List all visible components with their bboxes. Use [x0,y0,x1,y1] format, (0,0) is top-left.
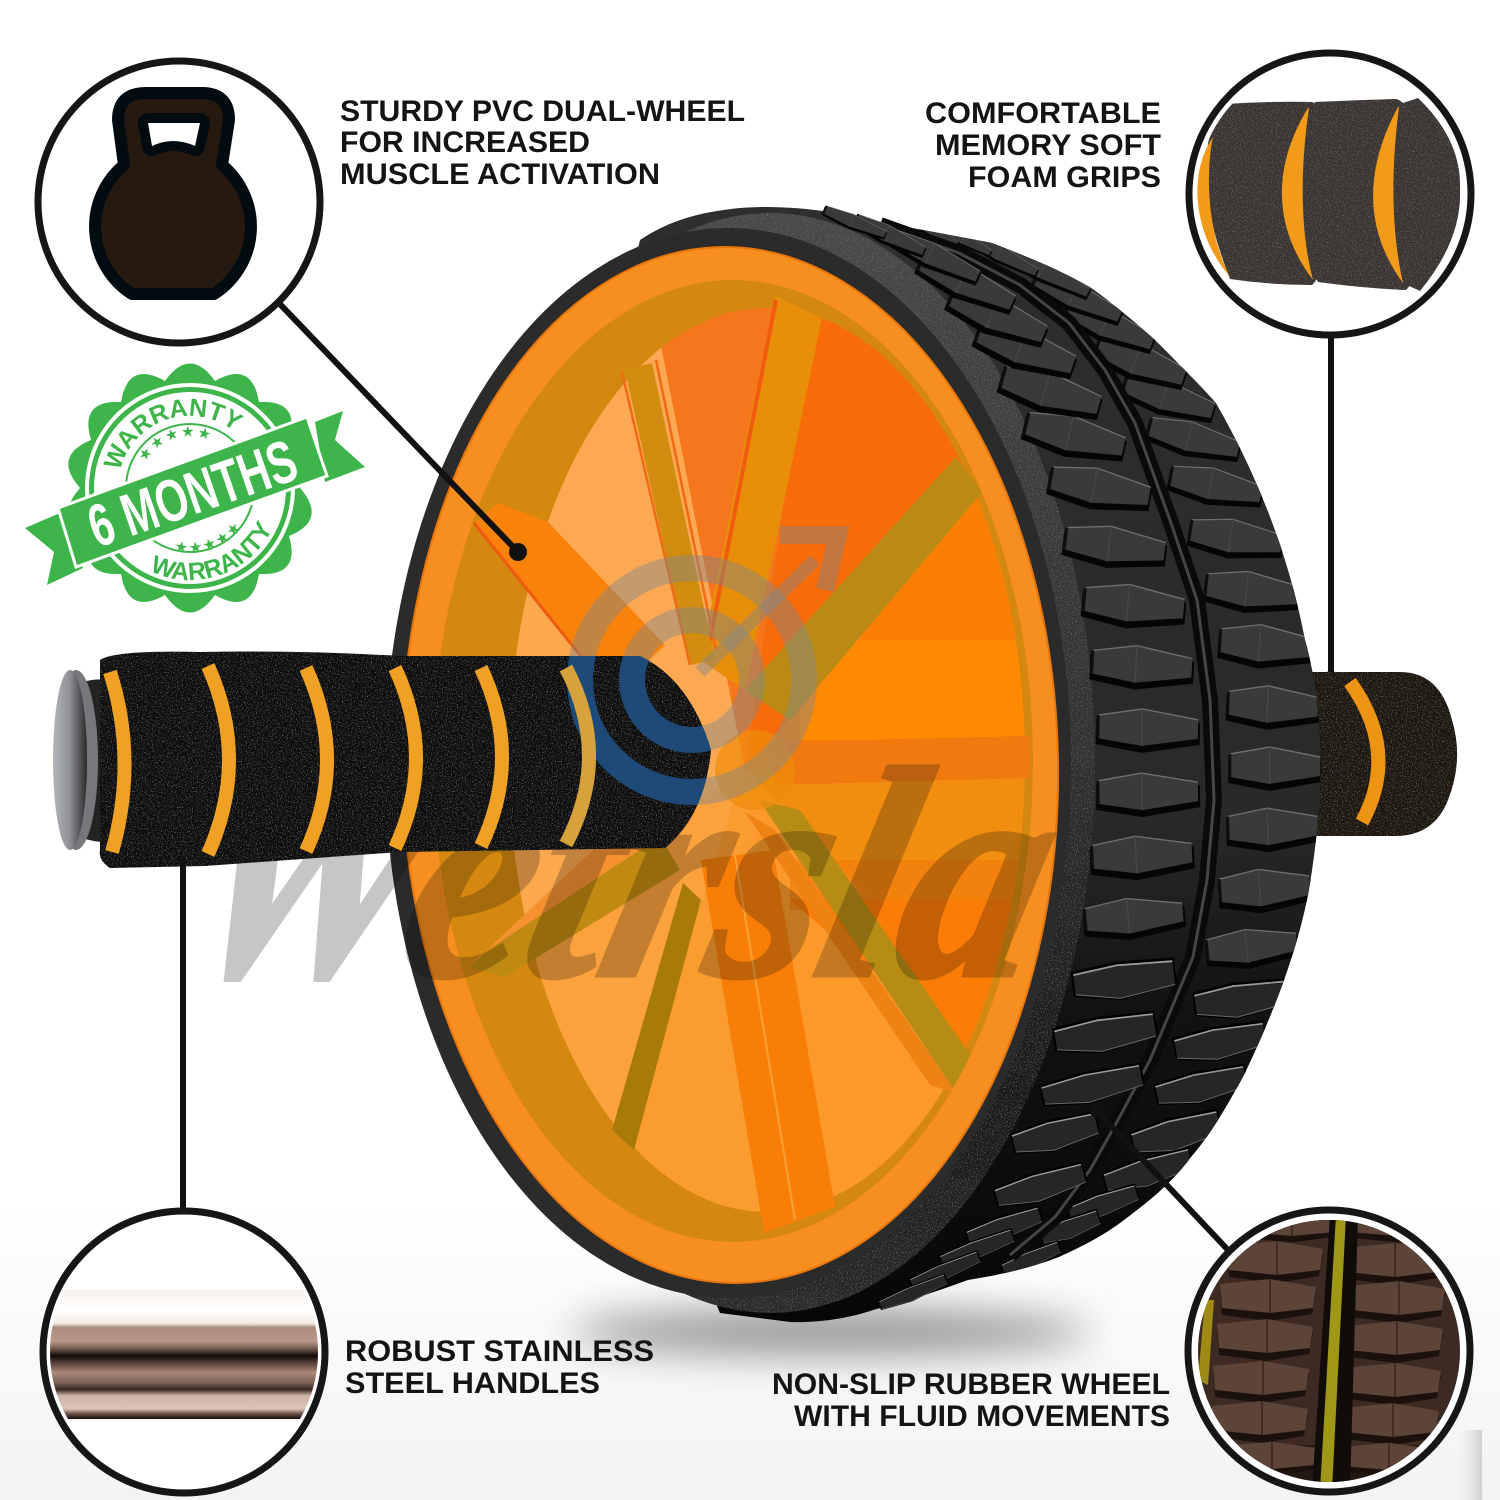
leader line: kettlebell callout [276,300,527,561]
text: rubber wheel [772,1368,1170,1433]
warranty badge [25,364,365,612]
watermark script text: Wetrsla [149,708,1092,1040]
callout circle: tread [1188,1209,1470,1495]
handle end cap [53,670,141,850]
right handle foam [1300,672,1457,836]
badge ribbon text: 6 MONTHS [79,427,306,560]
wheel: black rim [385,228,1071,1298]
badge top text: WARRANTY [103,398,244,467]
text: PVC wheel: MUSCLE ACTIVATION [340,158,660,191]
right handle orange ring [1350,682,1378,822]
text: PVC wheel: STURDY PVC DUAL-WHEEL [340,95,745,128]
callout circle: kettlebell [38,61,320,343]
text: steel handles [345,1335,654,1400]
wheel: olive inner band [433,280,1033,1242]
watermark target logo [580,535,838,792]
wheel: textured sidewall [445,213,1095,1313]
badge white ring [85,383,295,593]
wheel: back tread blocks [909,216,1322,1279]
foam grip photo [1197,98,1460,291]
wheel: groove between the two tires [880,225,1214,1255]
wheel: rubber tire body [500,207,1320,1322]
badge top stars: ★ ★ ★ ★ ★ [140,426,210,460]
icon: kettlebell [95,93,251,294]
text: steel handles: ROBUST STAINLESS [345,1335,654,1368]
tread photo [1198,1220,1460,1482]
text: PVC wheel [340,95,745,191]
text: steel handles: STEEL HANDLES [345,1367,600,1400]
left foam handle [53,652,711,868]
floor shadow [570,1310,1090,1354]
grip orange bands [1197,107,1403,283]
wheel: front tread blocks [820,203,1200,1313]
wheel: orange outer ring [393,241,1067,1289]
wheel sectors [514,308,1025,1212]
badge ribbon tails [25,513,83,585]
leader line: steel handle callout [180,858,186,1210]
text: foam grips [925,97,1161,194]
text: foam grips: MEMORY SOFT [935,129,1161,162]
text: rubber wheel: WITH FLUID MOVEMENTS [794,1400,1170,1433]
callout circle: foam grips [1189,53,1471,335]
handle watermark overlay [567,656,711,805]
badge bottom stars: ★ ★ ★ ★ ★ [176,524,238,551]
leader line: rubber wheel callout [1090,1104,1228,1250]
badge seal [68,364,312,612]
callout circle: stainless steel [43,1211,325,1493]
handle orange rings [110,666,589,854]
text: foam grips: FOAM GRIPS [968,161,1161,194]
text: foam grips: COMFORTABLE [925,97,1161,130]
text: PVC wheel: FOR INCREASED [340,126,590,159]
wheel spokes [469,296,1030,1233]
steel tube photo [50,1290,318,1419]
badge ribbon [58,417,327,567]
badge bottom text: WARRANTY [154,520,270,580]
handle foam sleeve [100,652,711,868]
leader line: top-right foam callout [1322,336,1340,689]
text: rubber wheel: NON-SLIP RUBBER WHEEL [772,1368,1170,1401]
